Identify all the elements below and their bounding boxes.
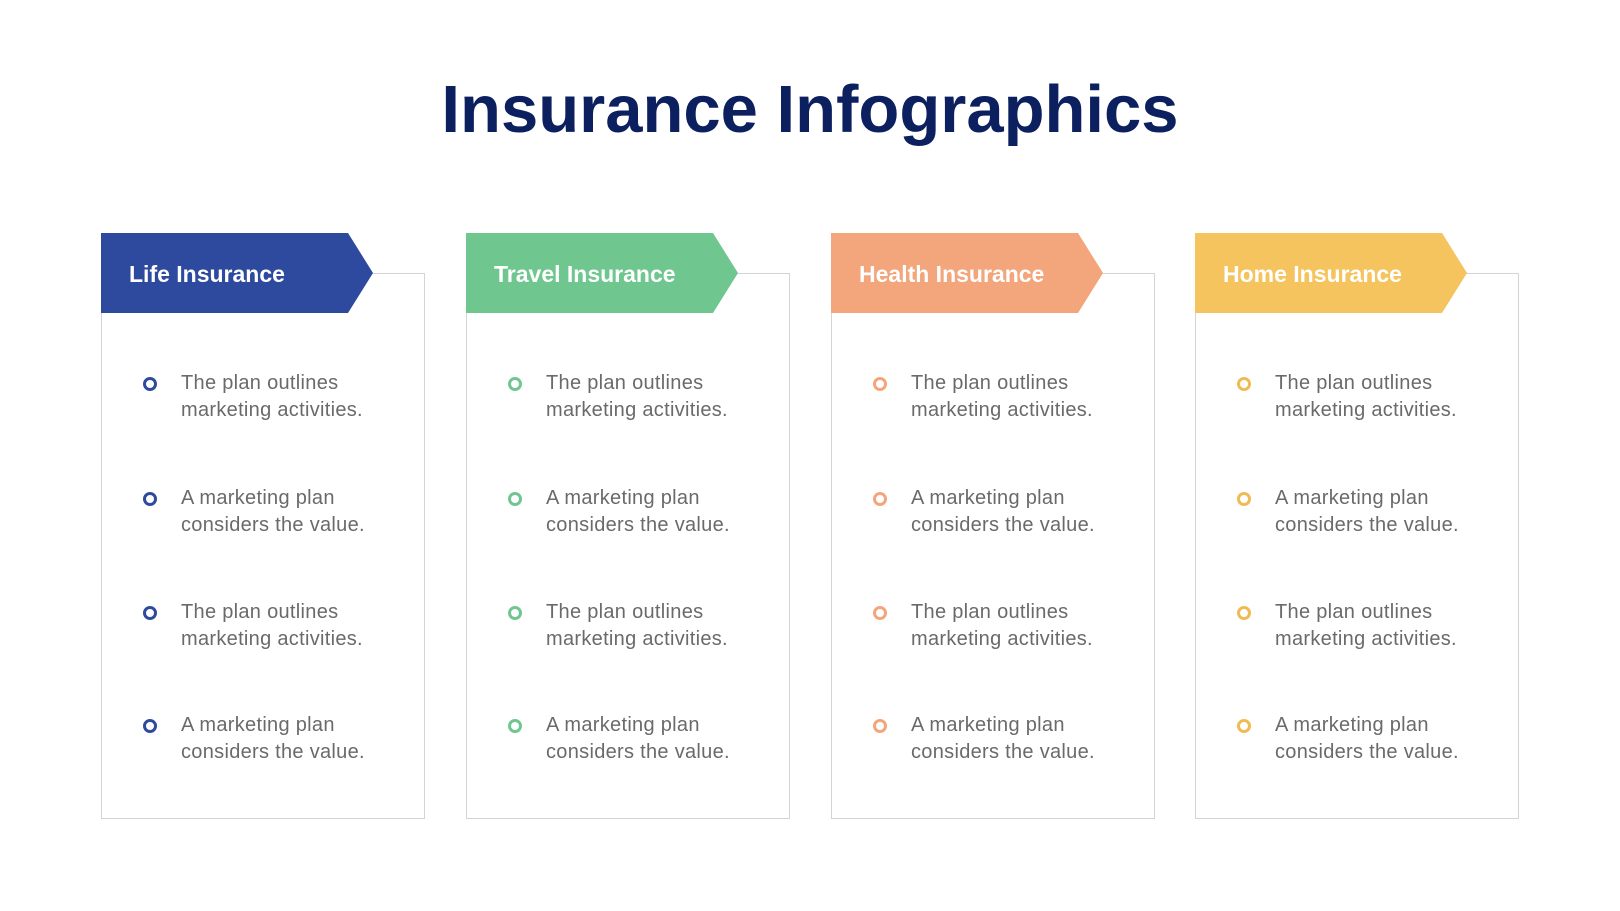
banner: home insurance	[1195, 233, 1467, 313]
bullet 2	[1237, 487, 1459, 536]
bullet 3	[508, 601, 728, 650]
bullet 3	[1237, 601, 1457, 650]
bullet 1: marketing activities.	[911, 399, 1093, 421]
title: Insurance Infographics	[441, 72, 1179, 147]
bullet 2: considers the value.	[911, 514, 1095, 536]
bullet 4	[508, 714, 730, 763]
bullet 3	[143, 601, 363, 650]
bullet 1: The plan outlines	[1275, 372, 1432, 394]
banner: health insurance	[831, 233, 1103, 313]
banner: life insurance: Life Insurance	[129, 261, 285, 287]
bullet 2	[873, 487, 1095, 536]
bullet 4	[1237, 714, 1459, 763]
bullet 3: The plan outlines	[546, 601, 703, 623]
bullet 2: A marketing plan	[546, 487, 700, 509]
bullet 3: marketing activities.	[911, 628, 1093, 650]
panel: health insurance	[831, 233, 1155, 819]
banner: home insurance: Home Insurance	[1223, 261, 1402, 287]
panel: home insurance	[1195, 233, 1519, 819]
bullet 2	[143, 487, 365, 536]
banner: travel insurance	[466, 233, 738, 313]
banner: life insurance	[101, 233, 373, 313]
bullet 1	[873, 372, 1093, 421]
bullet 1	[143, 372, 363, 421]
banner: health insurance: Health Insurance	[859, 261, 1044, 287]
bullet 3: The plan outlines	[911, 601, 1068, 623]
bullet 4: considers the value.	[546, 741, 730, 763]
bullet 4: A marketing plan	[181, 714, 335, 736]
bullet 3: The plan outlines	[181, 601, 338, 623]
bullet 1: marketing activities.	[546, 399, 728, 421]
bullet 4: A marketing plan	[911, 714, 1065, 736]
bullet 4: considers the value.	[911, 741, 1095, 763]
bullet 1: marketing activities.	[181, 399, 363, 421]
bullet 2: A marketing plan	[911, 487, 1065, 509]
bullet 2	[508, 487, 730, 536]
bullet 4: A marketing plan	[546, 714, 700, 736]
bullet 1	[1237, 372, 1457, 421]
bullet 4: considers the value.	[181, 741, 365, 763]
bullet 2: considers the value.	[181, 514, 365, 536]
bullet 3: marketing activities.	[181, 628, 363, 650]
bullet 3: marketing activities.	[546, 628, 728, 650]
panel: travel insurance	[466, 233, 790, 819]
bullet 1: marketing activities.	[1275, 399, 1457, 421]
bullet 3: marketing activities.	[1275, 628, 1457, 650]
bullet 4	[143, 714, 365, 763]
bullet 1: The plan outlines	[546, 372, 703, 394]
bullet 1	[508, 372, 728, 421]
bullet 2: considers the value.	[1275, 514, 1459, 536]
bullet 1: The plan outlines	[181, 372, 338, 394]
bullet 1: The plan outlines	[911, 372, 1068, 394]
bullet 3: The plan outlines	[1275, 601, 1432, 623]
bullet 4: considers the value.	[1275, 741, 1459, 763]
panel: life insurance	[101, 233, 425, 819]
bullet 2: considers the value.	[546, 514, 730, 536]
bullet 4: A marketing plan	[1275, 714, 1429, 736]
banner: travel insurance: Travel Insurance	[494, 261, 676, 287]
bullet 2: A marketing plan	[1275, 487, 1429, 509]
bullet 3	[873, 601, 1093, 650]
bullet 4	[873, 714, 1095, 763]
bullet 2: A marketing plan	[181, 487, 335, 509]
